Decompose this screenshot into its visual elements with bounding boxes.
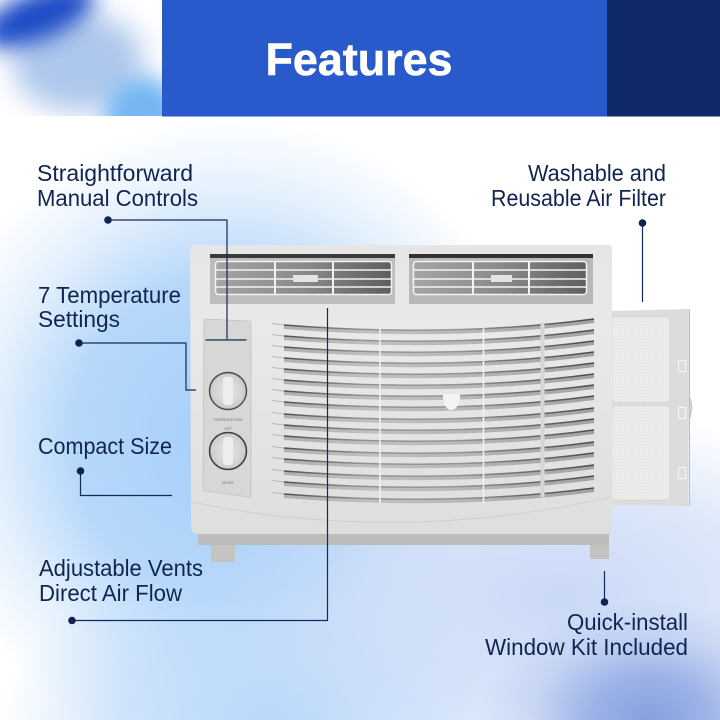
label text: Manual Controls (37, 185, 198, 211)
louvers: left stubs (272, 324, 284, 494)
mode label: MODE (222, 480, 234, 485)
louvers: dark upper edges (284, 319, 594, 499)
label text: Settings (38, 306, 120, 332)
feet (211, 541, 609, 562)
label text: Direct Air Flow (39, 580, 182, 606)
label: Compact Size (38, 433, 172, 496)
label: Washable and Reusable Air Filter (491, 160, 666, 302)
header: navy block (607, 0, 720, 116)
header: blue title band (162, 0, 607, 116)
control panel (203, 319, 251, 497)
title: Features (266, 34, 452, 85)
label text: Quick-install (567, 609, 688, 635)
label text: 7 Temperature (38, 282, 181, 308)
temperature knob (210, 372, 246, 410)
header: decorative gradient corner (0, 0, 162, 116)
label: Quick-install Window Kit Included (485, 571, 688, 660)
temperature label: TEMPERATURE (213, 417, 243, 422)
upper grille left (210, 254, 395, 304)
label text: Straightforward (37, 160, 193, 186)
label: 7 Temperature Settings (38, 282, 196, 390)
upper grille right (409, 254, 593, 304)
leader line (72, 308, 328, 620)
label text: Reusable Air Filter (491, 185, 666, 211)
label text: Washable and (528, 160, 666, 186)
label text: Adjustable Vents (39, 555, 203, 581)
leader line (108, 220, 227, 339)
case lower curve (191, 497, 612, 522)
leader line (642, 223, 644, 302)
louvers: grey slot shading (284, 321, 594, 501)
filter panel slid out (611, 309, 692, 506)
louver dividers (380, 322, 542, 503)
leader line (79, 343, 196, 390)
center logo badge (443, 394, 460, 410)
label: Adjustable Vents Direct Air Flow (39, 308, 328, 624)
mode knob (210, 432, 246, 470)
off label: OFF (224, 426, 233, 431)
label: Straightforward Manual Controls (37, 160, 227, 339)
case body (190, 245, 612, 534)
brand mark (206, 339, 246, 341)
base strip (198, 534, 609, 545)
leader line (80, 471, 172, 496)
label text: Compact Size (38, 433, 172, 459)
leader line (604, 571, 606, 602)
label text: Window Kit Included (485, 634, 688, 660)
air conditioner product illustration (190, 245, 692, 562)
